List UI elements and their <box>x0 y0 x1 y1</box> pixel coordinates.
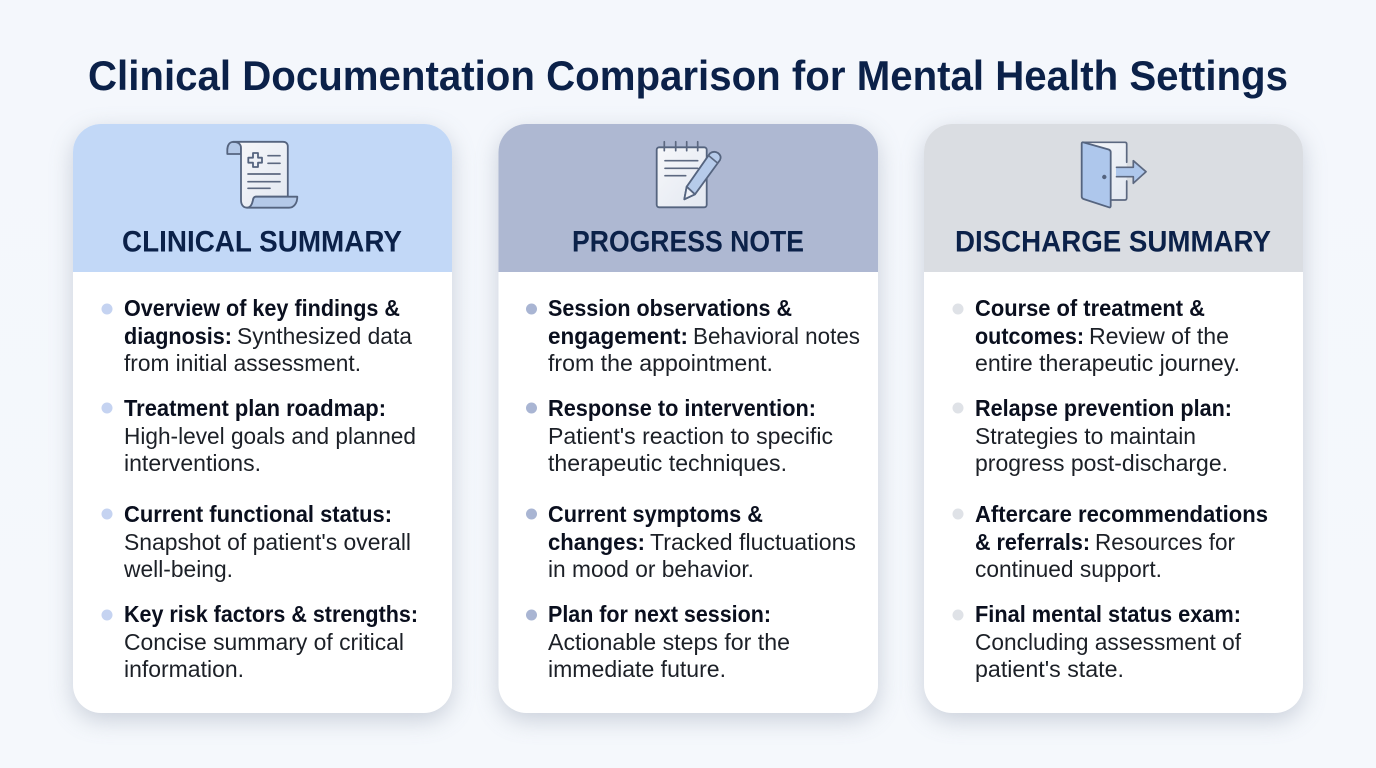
list item: treatment plan roadmap: interventions. <box>124 450 261 476</box>
list item: current symptoms <box>526 501 856 582</box>
heading: clinical summary: CLINICAL SUMMARY <box>122 226 402 258</box>
list item: aftercare recommendations <box>952 501 1268 582</box>
header band: clinical summary <box>73 124 452 272</box>
panel: progress note <box>498 124 878 720</box>
list item: relapse prevention plan: progress post-discharge. <box>975 450 1228 476</box>
list item: treatment plan roadmap: Treatment plan roadmap: <box>124 395 386 421</box>
list item: aftercare recommendations: & referrals: <box>975 529 1090 555</box>
list item: treatment plan roadmap <box>102 395 416 476</box>
list item: response to intervention: therapeutic techniques. <box>548 450 787 476</box>
list item: treatment plan roadmap: High-level goals and planned <box>124 423 416 449</box>
list item: key risk factors: Concise summary of critical <box>124 629 404 655</box>
list item: plan for next session <box>526 601 790 682</box>
list item: session observations: Behavioral notes <box>693 323 860 349</box>
list item: course of treatment <box>952 295 1240 376</box>
list item: current functional status: Current functional status: <box>124 501 392 527</box>
icon: notepad and pencil <box>657 142 721 207</box>
list item: overview of key findings: Synthesized data <box>237 323 413 349</box>
heading: discharge summary: DISCHARGE SUMMARY <box>955 226 1271 258</box>
heading: progress note: PROGRESS NOTE <box>572 226 804 258</box>
list item: overview of key findings: from initial assessment. <box>124 350 361 376</box>
header band: progress note <box>498 124 878 272</box>
list item: plan for next session: Plan for next session: <box>548 601 771 627</box>
list item: course of treatment: Review of the <box>1089 323 1229 349</box>
list item: session observations: Session observations & <box>548 295 792 321</box>
panel: clinical summary <box>73 124 452 720</box>
list item: current functional status: well-being. <box>123 556 233 582</box>
list item: current symptoms: in mood or behavior. <box>548 556 754 582</box>
list item: current functional status: Snapshot of patient's overall <box>124 529 411 555</box>
list item: relapse prevention plan <box>952 395 1232 476</box>
list item: overview of key findings: Overview of key findings & <box>124 295 400 321</box>
list item: aftercare recommendations: Resources for <box>1095 529 1235 555</box>
list item: overview of key findings: diagnosis: <box>124 323 232 349</box>
list item: current functional status <box>102 501 411 582</box>
title: Clinical Documentation Comparison for Mental Health Settings <box>88 52 1288 99</box>
list item: final mental status exam: patient's state. <box>975 656 1124 682</box>
header band: discharge summary <box>924 124 1303 272</box>
list item: response to intervention: Response to intervention: <box>548 395 816 421</box>
list item: current symptoms: changes: <box>548 529 645 555</box>
list item: course of treatment: Course of treatment & <box>975 295 1205 321</box>
panel: discharge summary <box>924 124 1303 720</box>
list item: key risk factors <box>102 601 418 682</box>
list item: session observations: engagement: <box>548 323 688 349</box>
list item: final mental status exam: Concluding assessment of <box>975 629 1241 655</box>
list item: response to intervention: Patient's reaction to specific <box>548 423 833 449</box>
list item: final mental status exam <box>952 601 1241 682</box>
list item: session observations: from the appointment. <box>548 350 773 376</box>
list item: current symptoms: Current symptoms & <box>548 501 763 527</box>
list item: course of treatment: entire therapeutic journey. <box>975 350 1240 376</box>
list item: plan for next session: immediate future. <box>548 656 726 682</box>
icon: open door with arrow <box>1082 142 1146 207</box>
icon: scroll document <box>227 142 297 208</box>
list item: key risk factors: information. <box>124 656 244 682</box>
list item: relapse prevention plan: Relapse prevention plan: <box>975 395 1232 421</box>
list item: key risk factors: Key risk factors & strengths: <box>124 601 418 627</box>
list item: aftercare recommendations: Aftercare recommendations <box>975 501 1268 527</box>
list item: session observations <box>526 295 860 376</box>
list item: course of treatment: outcomes: <box>975 323 1084 349</box>
list item: final mental status exam: Final mental status exam: <box>975 601 1241 627</box>
list item: relapse prevention plan: Strategies to maintain <box>975 423 1196 449</box>
list item: current symptoms: Tracked fluctuations <box>650 529 856 555</box>
list item: response to intervention <box>526 395 833 476</box>
list item: aftercare recommendations: continued support. <box>975 556 1162 582</box>
list item: overview of key findings <box>102 295 413 376</box>
list item: plan for next session: Actionable steps for the <box>548 629 790 655</box>
